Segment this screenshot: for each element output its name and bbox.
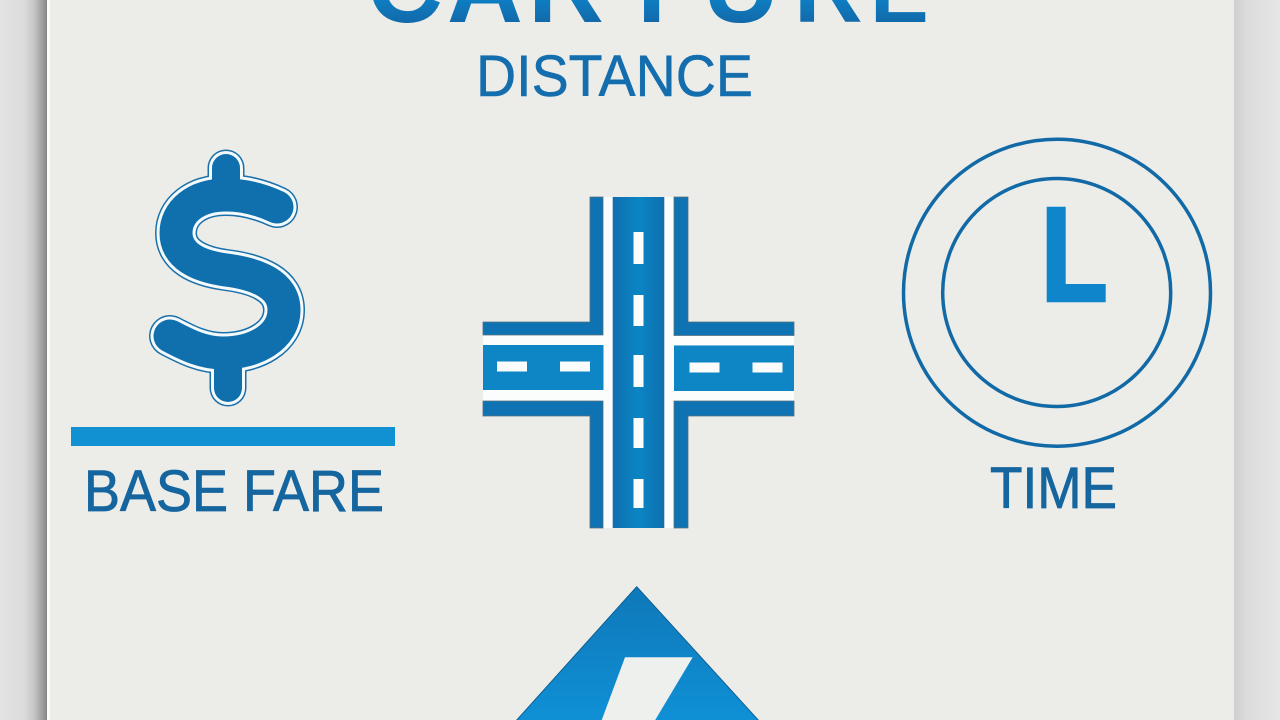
- label: base fare: BASE FARE: [84, 459, 384, 524]
- icon: clock: [904, 139, 1210, 446]
- base fare bar: [71, 427, 395, 446]
- icon: road intersection: [483, 197, 794, 528]
- label: time: TIME: [990, 456, 1117, 521]
- heading: distance: DISTANCE: [476, 44, 753, 109]
- icon: dollar sign: [170, 168, 284, 388]
- icon: warning triangle: [515, 587, 760, 720]
